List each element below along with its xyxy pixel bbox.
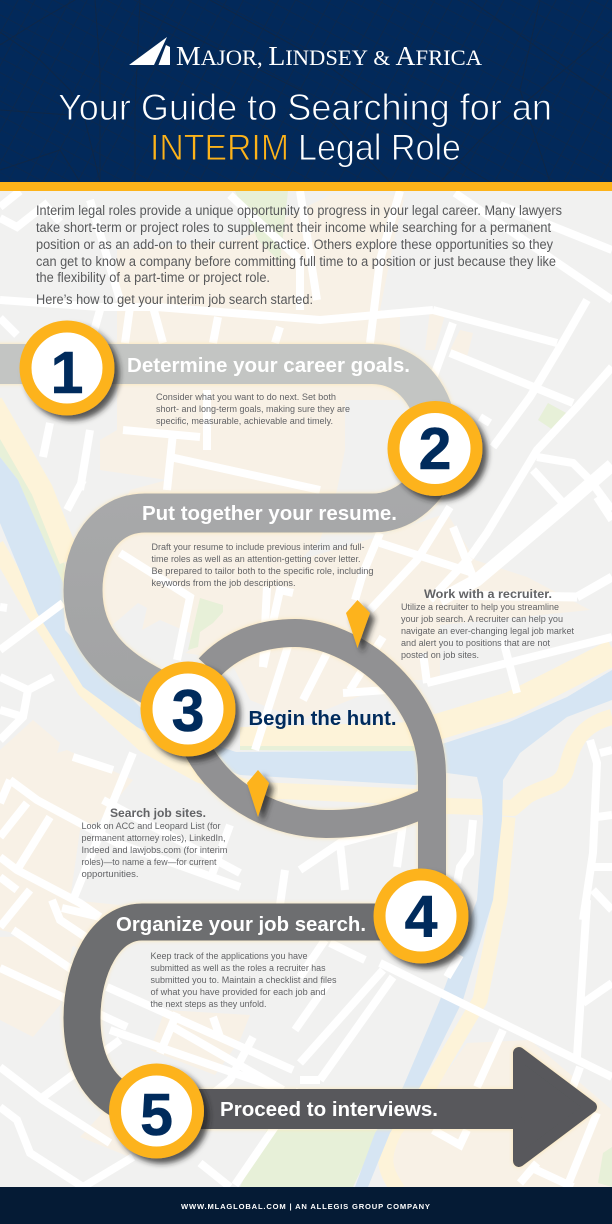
title: Your Guide to Searching for an (58, 87, 552, 128)
callout: work with a recruiter: your job search. A recruiter can help you (401, 614, 563, 625)
step 4 (116, 874, 462, 1010)
intro text: the flexibility of a part-time or project role. (36, 270, 270, 285)
body 1 (156, 392, 350, 427)
body 4: submitted you to. Maintain a checklist and files (150, 975, 337, 986)
intro text: take short-term or project roles to supplement their income while searching for a permanent (36, 220, 551, 235)
body 2: time roles as well as an attention-getting cover letter. (152, 554, 360, 565)
badge 3: 3 (172, 678, 204, 744)
body 2: keywords from the job descriptions. (152, 578, 296, 589)
step 5 (115, 1070, 438, 1152)
step 2 (142, 407, 476, 589)
road segment 1 (0, 364, 438, 435)
heading 3: Begin the hunt. (248, 708, 396, 730)
badge 4 (380, 874, 462, 958)
intro text (36, 203, 562, 307)
highway (0, 403, 612, 1190)
callout: work with a recruiter (401, 587, 574, 661)
badge 1 (26, 326, 108, 410)
callout: search job sites: permanent attorney roles), LinkedIn, (82, 833, 226, 844)
body 1: specific, measurable, achievable and timely. (156, 416, 333, 427)
river (0, 457, 612, 1187)
body 4: the next steps as they unfold. (150, 999, 266, 1010)
road segment 5: arrow (170, 1053, 591, 1161)
body 2: Be prepared to tailor both to the specific role, including (152, 566, 374, 577)
body 4: Keep track of the applications you have (150, 951, 308, 962)
body 1: short- and long-term goals, making sure they are (156, 404, 350, 415)
header band (0, 0, 612, 182)
gold rule (0, 182, 612, 191)
badge 2 (394, 407, 476, 490)
badge 3 (146, 668, 230, 750)
header map texture (0, 0, 612, 182)
callout: search job sites: Search job sites. (110, 806, 206, 820)
badge 5 (115, 1070, 198, 1152)
road segment 2 (83, 470, 436, 688)
intro text: position or as an add-on to their current practice. Others explore these opportunities so they (36, 237, 553, 252)
callout: search job sites: roles)—to name a few—for current (82, 857, 217, 868)
road segment 4 (82, 922, 400, 1100)
body 2: Draft your resume to include previous interim and full- (152, 542, 364, 553)
step 1 (26, 326, 410, 427)
callout: search job sites: Look on ACC and Leopard List (for (82, 821, 221, 832)
body 1: Consider what you want to do next. Set both (156, 392, 336, 403)
heading 2: Put together your resume. (142, 503, 397, 525)
badge 4: 4 (405, 884, 438, 950)
callout: search job sites (82, 806, 228, 880)
heading 5: Proceed to interviews. (220, 1099, 438, 1121)
badge 2: 2 (419, 416, 451, 482)
footer: WWW.MLAGLOBAL.COM | AN ALLEGIS GROUP COMPANY (181, 1202, 430, 1211)
logo (129, 37, 482, 71)
intro text: Interim legal roles provide a unique opportunity to progress in your legal career. Many lawyers (36, 203, 562, 218)
body 4: of what you have provided for each job and (150, 987, 326, 998)
body 4: submitted as well as the roles a recruiter has (150, 963, 326, 974)
logo mark (129, 37, 170, 65)
heading 4: Organize your job search. (116, 914, 366, 936)
title: Legal Role (298, 127, 461, 168)
badge 5: 5 (140, 1082, 173, 1148)
step 3 (146, 668, 396, 750)
road segment 3: loop (198, 633, 432, 885)
callout: search job sites: Indeed and lawjobs.com (for interim (82, 845, 228, 856)
callout: work with a recruiter: Utilize a recruiter to help you streamline (401, 602, 559, 613)
pin: search job sites (247, 770, 269, 817)
intro text: Here’s how to get your interim job search started: (36, 292, 313, 307)
body 4 (150, 951, 337, 1010)
heading 1: Determine your career goals. (127, 355, 410, 377)
body 2 (152, 542, 374, 589)
grey block (110, 603, 190, 658)
callout: work with a recruiter: posted on job sites. (401, 650, 479, 661)
badge 1: 1 (51, 340, 83, 406)
pin: work with a recruiter (346, 600, 370, 648)
title: INTERIM (150, 127, 289, 168)
callout: work with a recruiter: and alert you to positions that are not (401, 638, 550, 649)
callout: search job sites: opportunities. (82, 869, 138, 880)
intro text: can get to know a company before committing full time to a position or just because they like (36, 254, 556, 269)
callout: work with a recruiter: Work with a recruiter. (424, 587, 552, 601)
title (58, 87, 552, 168)
footer (0, 1187, 612, 1224)
callout: work with a recruiter: navigate an ever-changing legal job market (401, 626, 574, 637)
logo wordmark: MAJOR, LINDSEY & AFRICA (176, 41, 482, 71)
